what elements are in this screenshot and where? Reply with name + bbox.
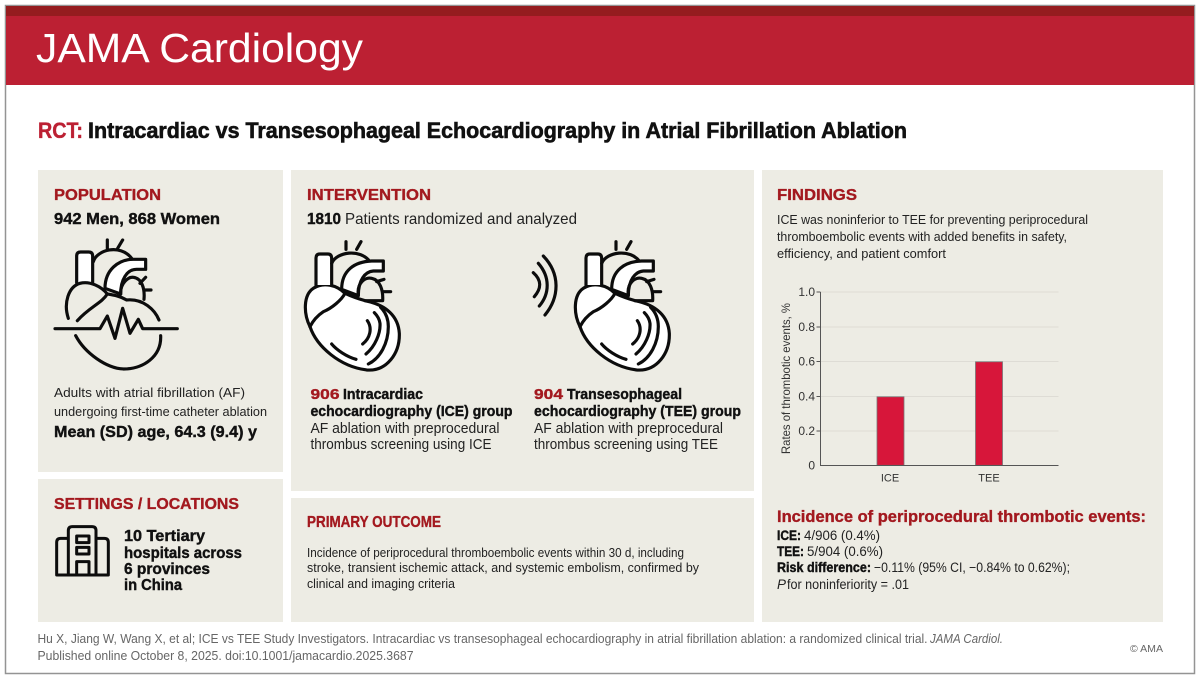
TEE group text: Transesophageal [567,387,682,403]
bar chart: 0.6 [798,354,815,368]
TEE group text: echocardiography (TEE) group [534,404,741,420]
ICE group text [310,387,513,453]
ICE group text: echocardiography (ICE) group [310,404,513,420]
settings text: 10 Tertiary [124,528,205,545]
settings text: in China [124,577,182,594]
TEE group text: 904 [534,387,563,403]
findings summary [777,212,1088,261]
bar chart: 0.8 [798,320,815,334]
incidence results: ICE: [777,528,801,543]
bar chart [779,285,1058,484]
population heading: POPULATION [54,187,161,204]
ICE group text: thrombus screening using ICE [310,437,492,453]
copyright: © AMA [1130,644,1163,655]
settings text: hospitals across [124,545,242,562]
icon: hospital building [57,527,108,575]
primary outcome text: stroke, transient ischemic attack, and systemic embolism, confirmed by [307,560,699,575]
TEE group text: thrombus screening using TEE [534,437,718,453]
bar chart: Rates of thrombotic events, % [779,303,793,454]
title: RCT: [38,118,83,143]
ICE group text: 906 [310,387,340,403]
bar: ICE [877,397,904,465]
incidence results: Risk difference: [777,560,871,575]
settings heading: SETTINGS / LOCATIONS [54,496,239,513]
population description: undergoing first-time catheter ablation [54,404,267,419]
primary outcome text: clinical and imaging criteria [307,576,456,591]
citation: Hu X, Jiang W, Wang X, et al; ICE vs TEE Study Investigators. Intracardiac vs transesophageal echocardiography in atrial fibrillation ablation: a randomized clinical trial. [38,631,928,646]
ICE group text: AF ablation with preprocedural [310,421,500,437]
incidence results: P [777,577,786,592]
bar chart: ICE [881,472,899,484]
bar chart: 0.2 [798,424,815,438]
intervention heading: INTERVENTION [307,187,431,204]
bar chart: 1.0 [798,285,815,299]
panel: settings and locations [38,479,283,622]
settings text: 6 provinces [124,561,210,578]
incidence results: 5/904 (0.6%) [807,544,883,559]
primary outcome text [307,545,699,591]
findings summary: ICE was noninferior to TEE for preventing periprocedural [777,212,1088,227]
population description: Adults with atrial fibrillation (AF) [54,385,245,400]
bar chart: 0.4 [798,390,815,404]
panel: population [38,170,283,472]
settings text [124,528,242,594]
incidence heading: Incidence of periprocedural thrombotic events: [777,507,1146,526]
findings heading: FINDINGS [777,187,857,204]
bar chart: TEE [978,472,1000,484]
findings summary: efficiency, and patient comfort [777,246,946,261]
population count: 942 Men, 868 Women [54,211,220,228]
incidence results: TEE: [777,544,804,559]
bar: TEE [976,362,1002,465]
icon: heart, ICE [305,242,399,370]
icon: heart, TEE [575,242,669,370]
header banner [6,6,1194,85]
incidence results [777,528,1070,592]
bar chart: 0 [808,458,815,472]
panel: findings [762,170,1163,622]
randomized count: Patients randomized and analyzed [345,211,577,228]
primary outcome heading: PRIMARY OUTCOME [307,514,441,531]
TEE group text: AF ablation with preprocedural [534,421,723,437]
panel: primary outcome [291,498,754,622]
incidence results: for noninferiority = .01 [787,577,909,592]
population description [54,385,267,419]
incidence results: −0.11% (95% CI, −0.84% to 0.62%); [874,560,1070,575]
mean age: Mean (SD) age, 64.3 (9.4) y [54,424,257,441]
icon: heart with ECG trace [55,240,177,369]
findings summary: thromboembolic events with added benefits in safety, [777,229,1067,244]
citation: Published online October 8, 2025. doi:10.1001/jamacardio.2025.3687 [38,648,414,663]
citation: JAMA Cardiol. [929,631,1003,646]
randomized count: 1810 [307,211,341,228]
journal name: JAMA Cardiology [36,25,364,71]
ICE group text: Intracardiac [343,387,423,403]
panel: intervention [291,170,754,491]
TEE group text [534,387,741,453]
icon: sound waves [533,256,556,315]
incidence results: 4/906 (0.4%) [804,528,880,543]
primary outcome text: Incidence of periprocedural thromboembolic events within 30 d, including [307,545,684,560]
title: Intracardiac vs Transesophageal Echocardiography in Atrial Fibrillation Ablation [88,118,907,143]
citation [38,631,1003,663]
